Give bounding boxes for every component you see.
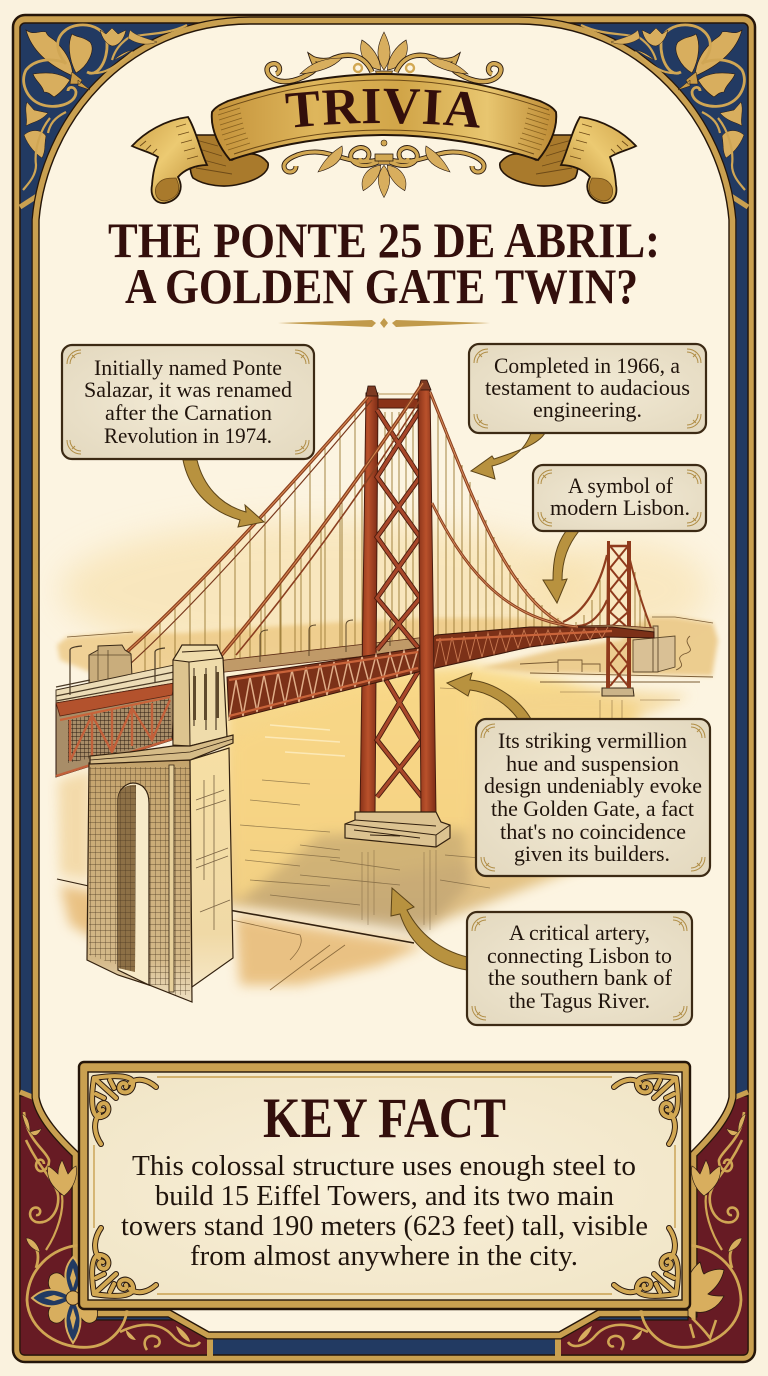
distant hills [57,617,718,688]
sky and water wash [58,520,710,985]
main tower right leg [418,388,436,815]
callout: completed [469,344,706,433]
main tower pier [345,812,450,847]
far tower [602,541,634,696]
banner main band [212,74,556,160]
title: A GOLDEN GATE TWIN? [125,258,638,314]
callout: vermillion: Its striking vermillion [498,728,687,753]
title [108,212,660,314]
arrow: to cables [183,460,264,527]
callout: vermillion: the Golden Gate, a fact [491,796,694,821]
banner label: TRIVIA [285,88,480,128]
title divider [278,318,490,328]
callout: vermillion [476,719,710,876]
banner left tail [132,117,268,203]
ornament: top left corner [23,25,187,190]
callout: symbol: modern Lisbon. [550,495,690,520]
callout: artery [467,912,692,1025]
tower finials [366,380,431,396]
callout: renamed: Salazar, it was renamed [84,377,292,402]
ornament: bottom right leaves [688,1262,724,1338]
south shore [57,879,414,990]
stone pylon [87,645,233,1002]
ornament: bottom right corner scrollwork [568,1112,746,1350]
callout: renamed: Initially named Ponte [94,355,282,380]
far road deck [58,625,654,704]
far span cables [563,555,651,628]
ornament: bottom left corner scrollwork [22,1112,200,1350]
callout: completed: Completed in 1966, a [494,353,680,378]
callout: artery: the Tagus River. [509,988,650,1013]
ribbon banner [130,73,638,204]
callout: artery: the southern bank of [488,965,673,990]
panel: key fact [79,1062,690,1309]
callout: vermillion: hue and suspension [506,751,679,776]
key fact heading: KEY FACT [263,1087,506,1150]
key fact body [121,1150,648,1272]
lamp posts on deck [260,618,396,662]
key fact body: from almost anywhere in the city. [190,1240,578,1272]
callout: completed: engineering. [533,397,642,422]
callout: symbol: A symbol of [568,473,674,498]
banner right tail [500,117,636,203]
main tower left leg [360,393,378,815]
main cables [90,383,578,683]
callout: artery: A critical artery, [509,920,650,945]
callout: vermillion: that's no coincidence [500,819,686,844]
main tower cross bracing [377,394,422,797]
key fact body: build 15 Eiffel Towers, and its two main [155,1180,614,1212]
callout: renamed [62,345,314,459]
callout: vermillion: design undeniably evoke [484,773,702,798]
far approach piers [633,626,675,672]
callout: renamed: Revolution in 1974. [104,423,272,448]
title: THE PONTE 25 DE ABRIL: [108,212,660,268]
arrow: to river [391,888,467,970]
ornament: banner top scrolls [267,32,501,82]
callout: symbol [533,465,706,531]
arrow: to deck [447,673,531,719]
corner ornaments [92,1076,678,1296]
ornament: banner bottom scrolls [284,140,484,198]
callout: artery: connecting Lisbon to [487,943,672,968]
near road and rear pylon [56,645,174,706]
water ripples and reflections [240,688,680,930]
callout: completed: testament to audacious [485,375,690,400]
callout: vermillion: given its builders. [514,841,670,866]
callout: renamed: after the Carnation [105,400,272,425]
arrow: to far span [543,531,579,603]
ornament: top right corner [581,25,745,190]
illustration: bridge scene [56,380,718,1002]
arrow: to tower [471,433,545,479]
key fact body: This colossal structure uses enough steel to [132,1150,636,1182]
main deck truss [227,627,654,720]
key fact body: towers stand 190 meters (623 feet) tall, visible [121,1210,648,1242]
suspender cables [130,410,645,680]
ornament: bottom left flower [32,1257,98,1343]
near deck truss [56,683,175,777]
